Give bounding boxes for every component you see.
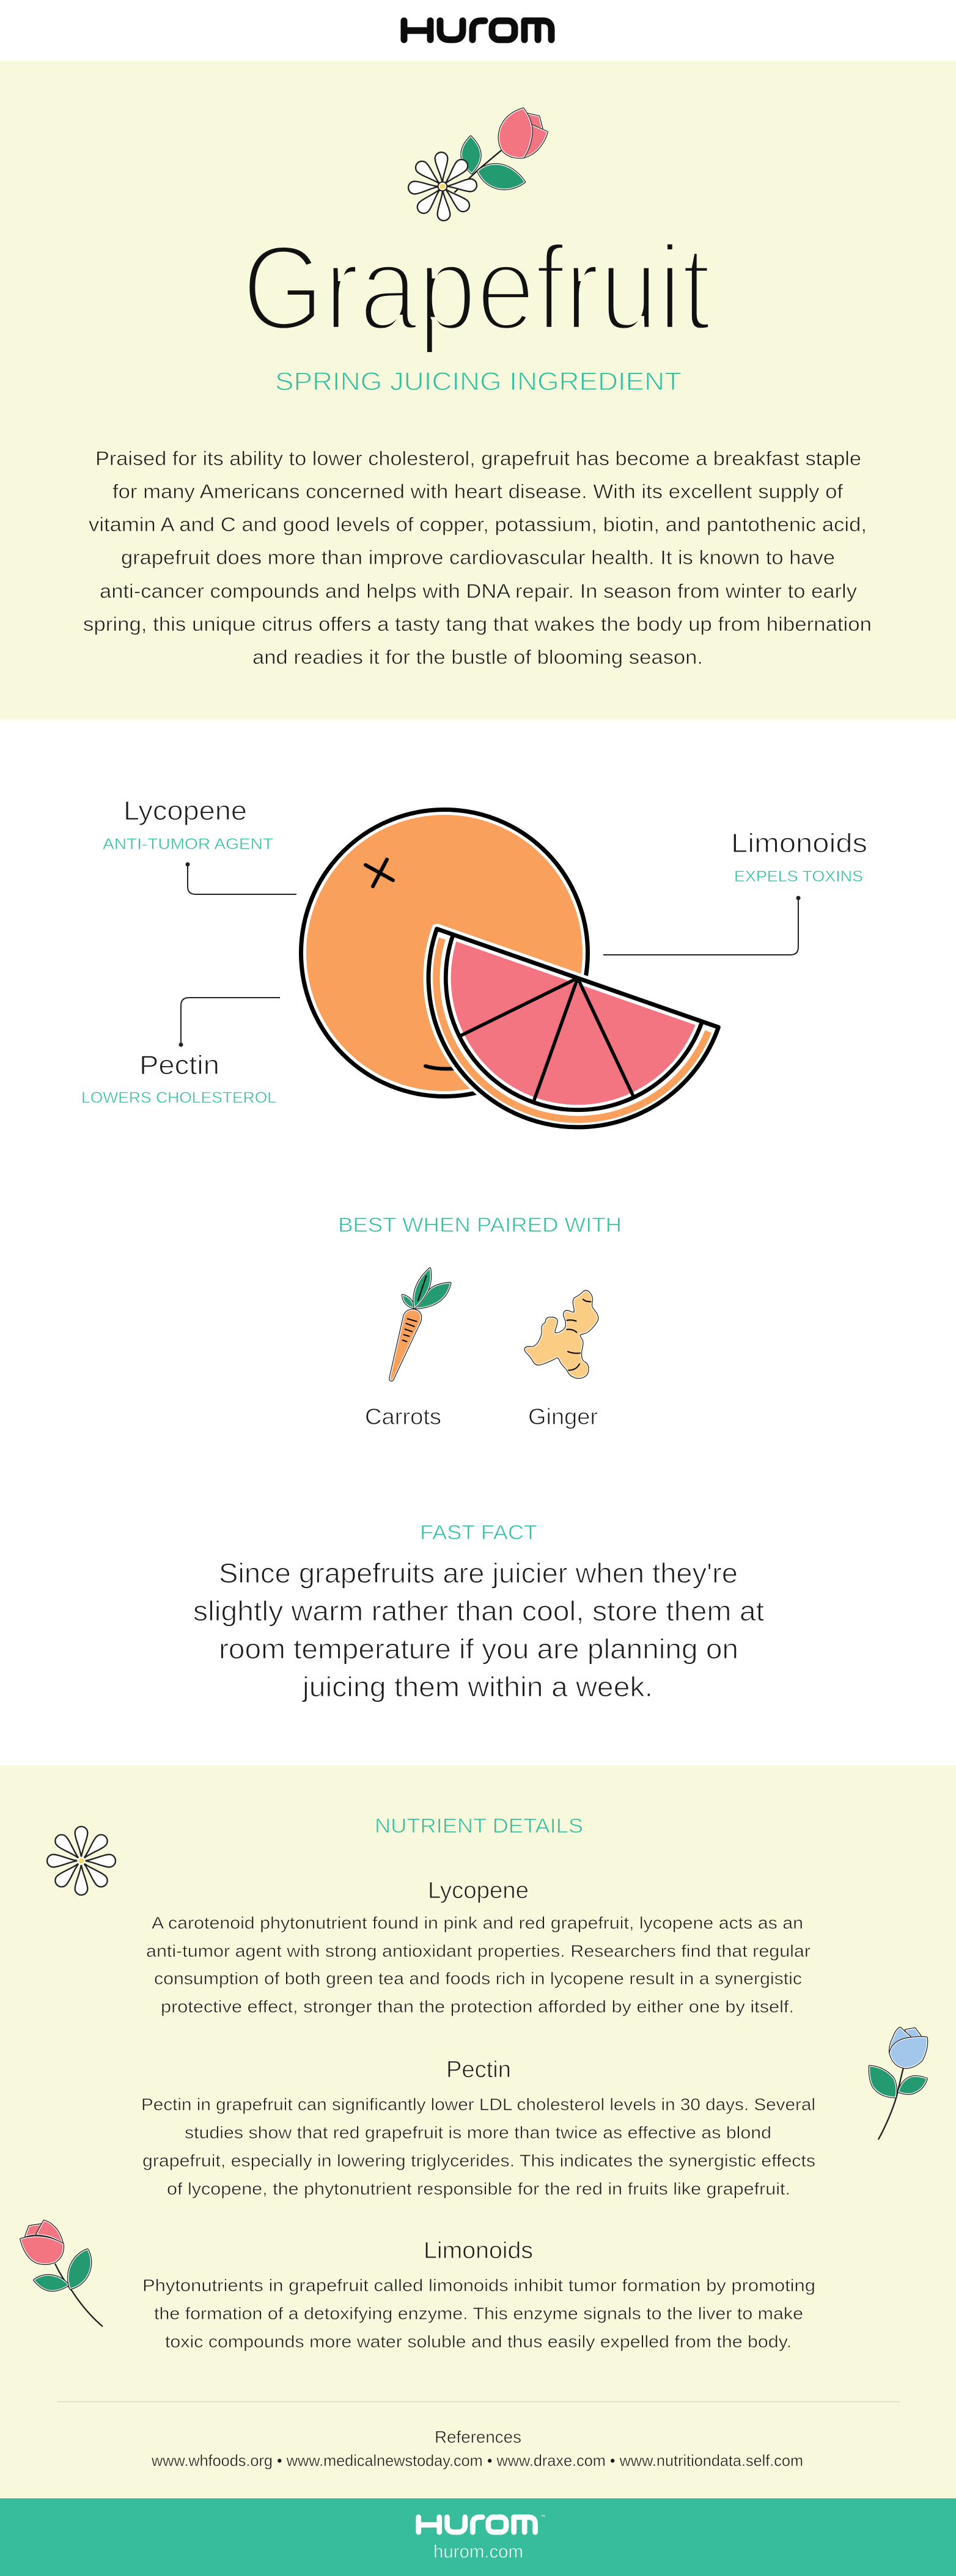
nutrient: Lycopene: anti-tumor agent with strong antioxidant properties. Researchers find that regular: [146, 1941, 811, 1960]
intro paragraph: anti-cancer compounds and helps with DNA repair. In season from winter to early: [100, 580, 857, 602]
upper leaf: [461, 136, 480, 173]
fast fact text: slightly warm rather than cool, store them at: [193, 1595, 765, 1627]
icon: blue rose: [870, 2028, 927, 2139]
label: Lycopene: ANTI-TUMOR AGENT: [103, 836, 273, 853]
nutrient: Lycopene: A carotenoid phytonutrient found in pink and red grapefruit, lycopene acts as an: [152, 1913, 803, 1932]
footer logo: ™: [541, 2515, 545, 2519]
intro paragraph: for many Americans concerned with heart disease. With its excellent supply of: [112, 480, 843, 502]
references: www.whfoods.org • www.medicalnewstoday.com • www.draxe.com • www.nutritiondata.self.com: [151, 2451, 803, 2470]
label: Pectin: Pectin: [139, 1050, 219, 1080]
label: Limonoids: [731, 828, 867, 885]
hurom logo: [404, 21, 551, 40]
slice segment lines: [460, 978, 633, 1102]
connector: Lycopene: [186, 862, 296, 894]
label: Limonoids: EXPELS TOXINS: [734, 868, 863, 885]
icon: rose and daisy: [407, 109, 547, 222]
nutrient: Pectin: Pectin in grapefruit can significantly lower LDL cholesterol levels in 30 days. Several: [141, 2095, 815, 2114]
fast fact text: Since grapefruits are juicier when they're: [219, 1558, 738, 1589]
footer logo: [419, 2515, 545, 2532]
rose main petal: [499, 109, 532, 158]
connector: Limonoids: [603, 896, 801, 955]
heading: best when paired with: BEST WHEN PAIRED WITH: [338, 1213, 622, 1236]
nutrient: Lycopene: Lycopene: [428, 1878, 529, 1904]
right leaf: [478, 164, 524, 189]
intro paragraph: grapefruit does more than improve cardiovascular health. It is known to have: [121, 546, 835, 569]
nutrient: Limonoids: Limonoids: [424, 2238, 533, 2264]
nutrient: Limonoids: toxic compounds more water soluble and thus easily expelled from the body.: [165, 2332, 792, 2351]
label: Ginger: Ginger: [528, 1404, 598, 1429]
heading: fast fact: FAST FACT: [420, 1521, 537, 1544]
label: Lycopene: [103, 796, 273, 853]
nutrient: Pectin: studies show that red grapefruit is more than twice as effective as blond: [185, 2123, 771, 2142]
references: [151, 2427, 803, 2470]
grapefruit illustration: [301, 809, 718, 1168]
intro panel background: [0, 61, 956, 719]
intro paragraph: vitamin A and C and good levels of copper, potassium, biotin, and pantothenic acid,: [89, 513, 867, 535]
stem: [454, 150, 501, 193]
references divider: [57, 2401, 900, 2402]
label: Lycopene: Lycopene: [123, 796, 247, 826]
nutrient: Pectin: Pectin: [446, 2057, 511, 2083]
nutrient: Pectin: [141, 2057, 815, 2198]
nutrient: Lycopene: protective effect, stronger than the protection afforded by either one by itself.: [161, 1997, 794, 2016]
nutrient: Limonoids: [142, 2238, 815, 2351]
nutrient: Pectin: of lycopene, the phytonutrient responsible for the red in fruits like grapefruit.: [167, 2179, 790, 2198]
rose back petals: [524, 114, 547, 157]
carrot leaves: [403, 1268, 450, 1308]
label: Pectin: LOWERS CHOLESTEROL: [81, 1089, 276, 1106]
header band: [0, 0, 956, 61]
nutrient: Pectin: grapefruit, especially in lowering triglycerides. This indicates the synergistic effects: [142, 2151, 815, 2170]
nutrient panel background: [0, 1765, 956, 2498]
fast fact text: room temperature if you are planning on: [219, 1633, 738, 1665]
carrot body: [390, 1310, 421, 1380]
heading: nutrient details: NUTRIENT DETAILS: [375, 1814, 583, 1837]
whole fruit: [301, 809, 588, 1097]
nutrient: Limonoids: Phytonutrients in grapefruit called limonoids inhibit tumor formation by promoting: [142, 2276, 815, 2295]
intro paragraph: spring, this unique citrus offers a tasty tang that wakes the body up from hibernation: [83, 613, 872, 635]
daisy: [407, 151, 478, 222]
subtitle: SPRING JUICING INGREDIENT: [275, 367, 682, 396]
fast fact text: juicing them within a week.: [301, 1671, 653, 1702]
title: Grapefruit: [242, 220, 711, 355]
nutrient: Lycopene: consumption of both green tea and foods rich in lycopene result in a synergistic: [154, 1969, 802, 1988]
label: Pectin: [81, 1050, 276, 1106]
references: References: [435, 2427, 521, 2446]
icon: ginger: [525, 1291, 598, 1378]
footer url: hurom.com: [433, 2542, 523, 2562]
label: Carrots: Carrots: [365, 1404, 441, 1429]
label: Limonoids: Limonoids: [731, 828, 867, 858]
icon: pink rose: [21, 2221, 103, 2327]
connector: Pectin: [178, 998, 280, 1047]
icon: daisy: [47, 1827, 116, 1895]
nutrient: Lycopene: [146, 1878, 811, 2016]
intro paragraph: [83, 447, 872, 668]
intro paragraph: Praised for its ability to lower cholesterol, grapefruit has become a breakfast staple: [95, 447, 861, 469]
intro paragraph: and readies it for the bustle of blooming season.: [252, 646, 703, 668]
icon: carrot: [390, 1268, 450, 1380]
footer band: [0, 2498, 956, 2576]
nutrient: Limonoids: the formation of a detoxifying enzyme. This enzyme signals to the liver to make: [154, 2304, 803, 2323]
fruit slice: [388, 929, 718, 1168]
fast fact text: [193, 1558, 765, 1702]
